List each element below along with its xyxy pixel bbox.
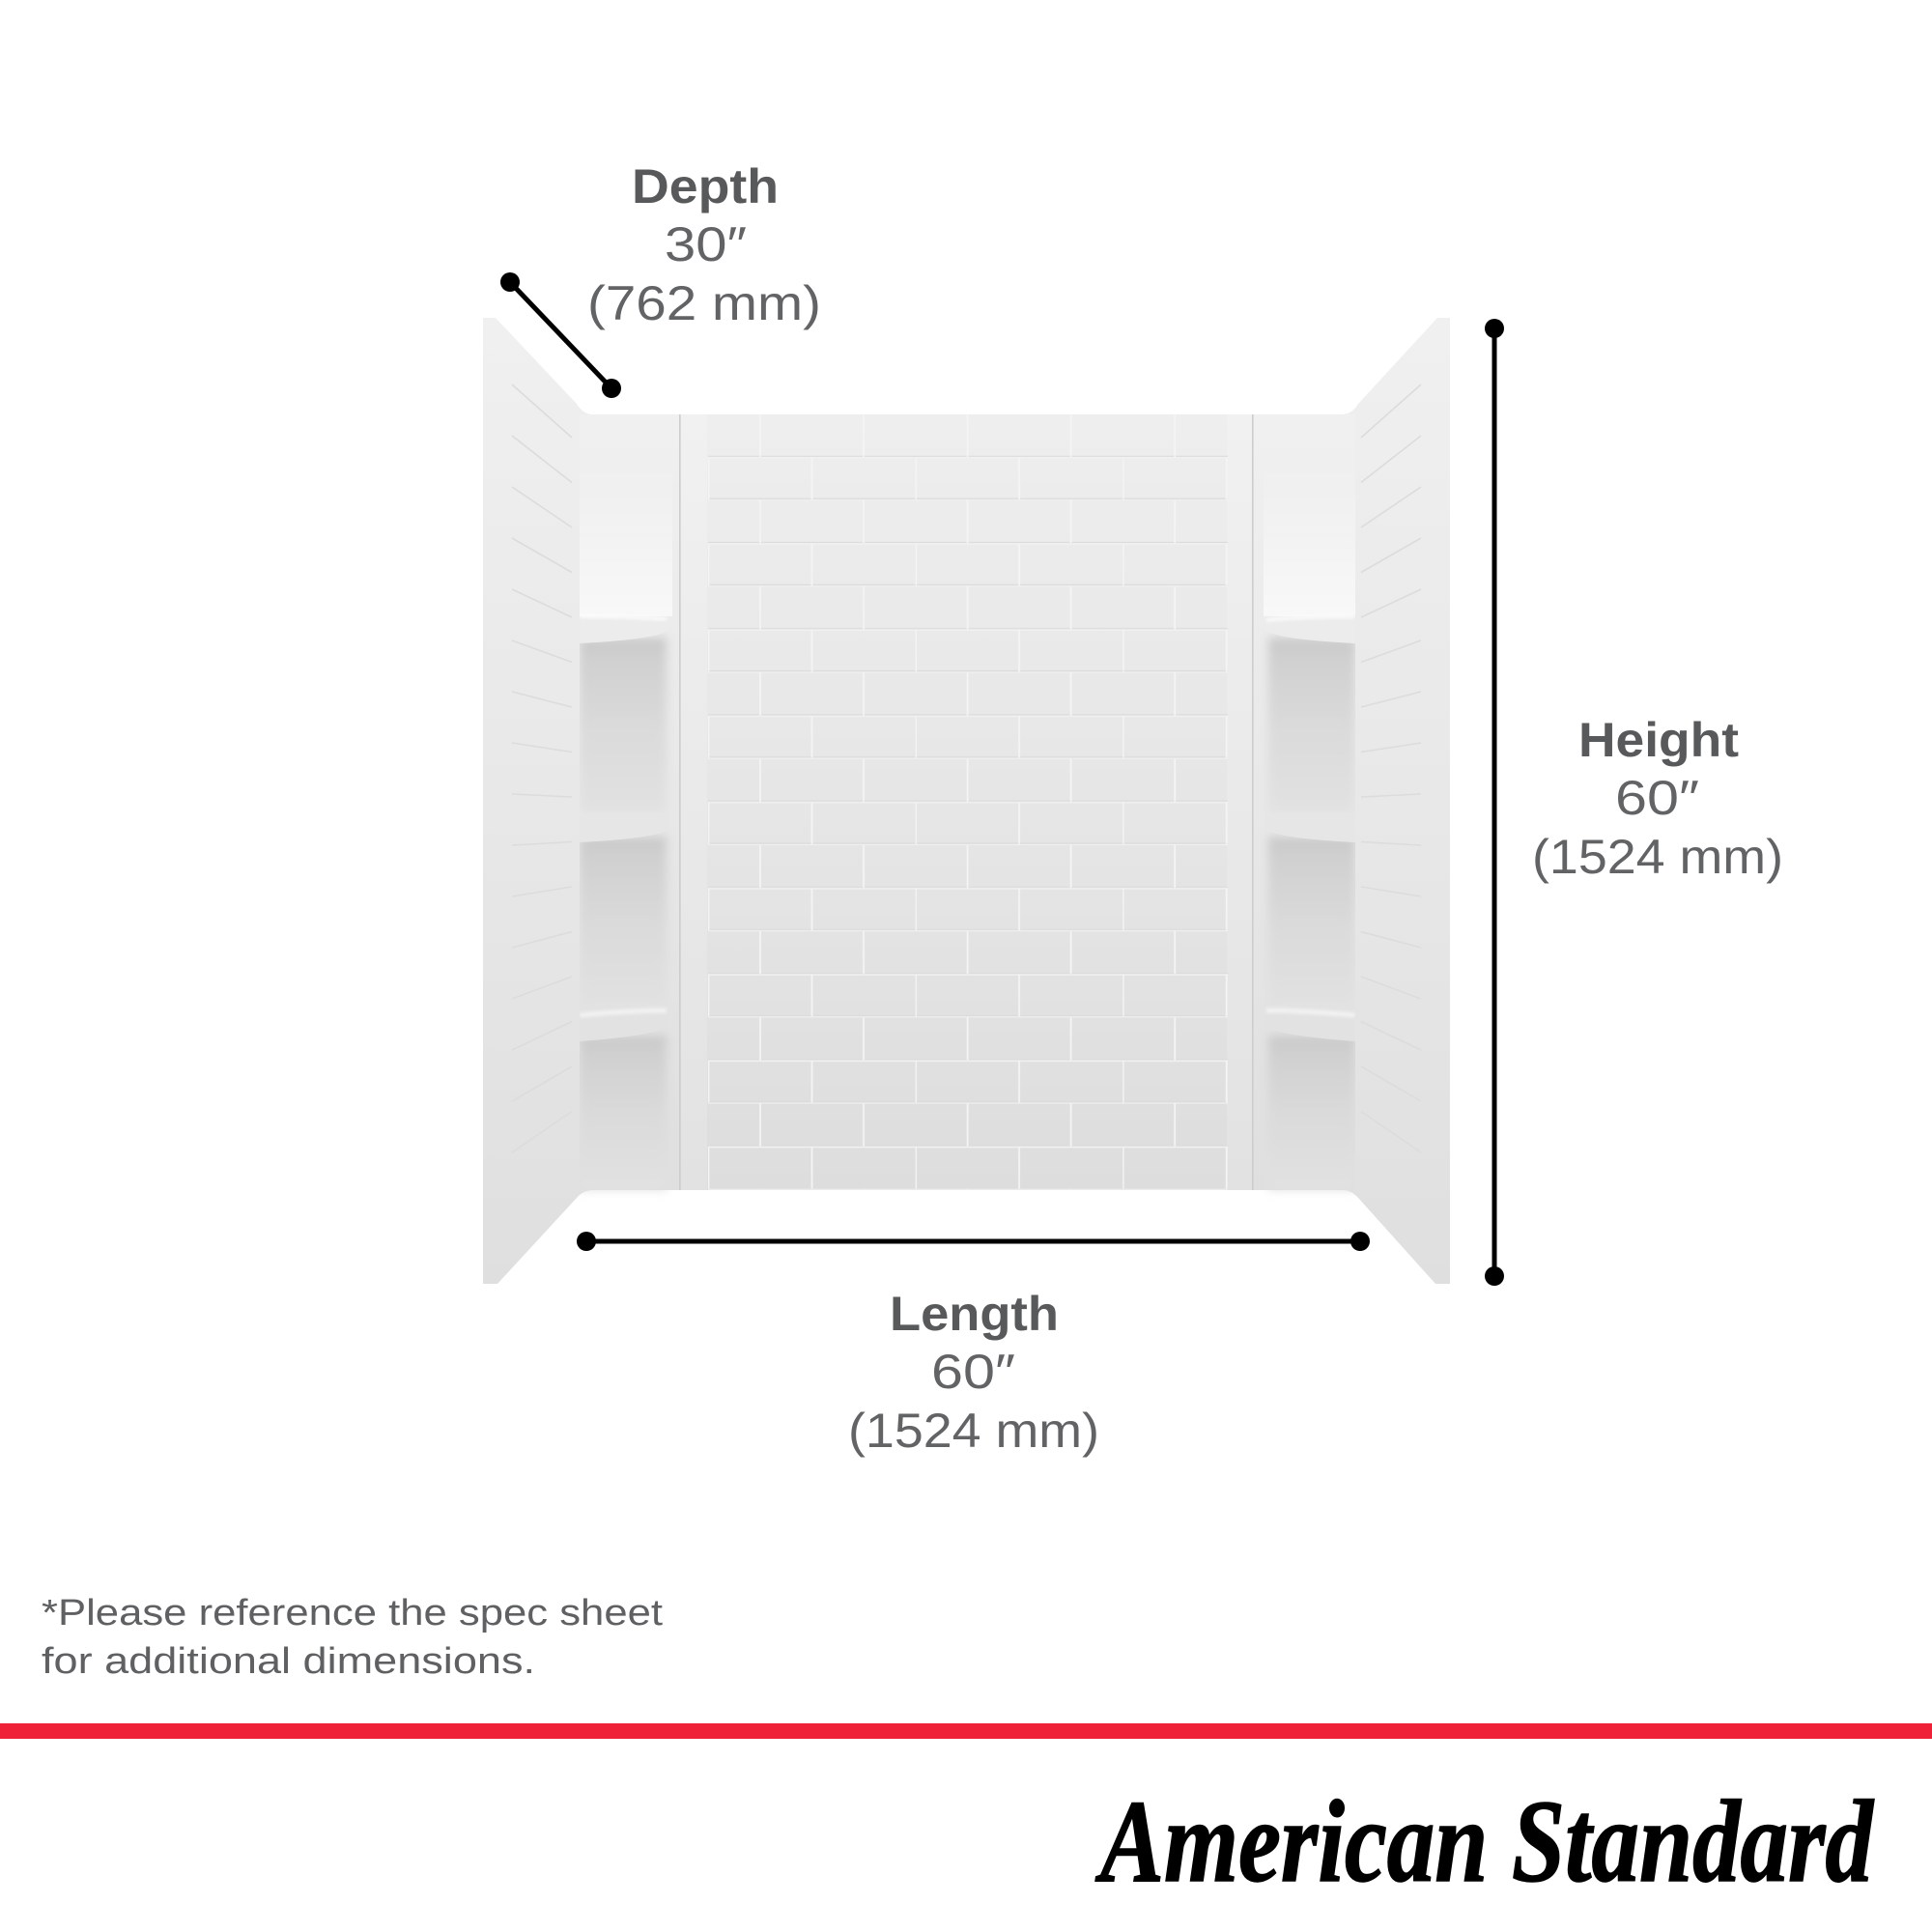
subway tile pattern bbox=[708, 414, 1228, 1190]
footnote: for additional dimensions. bbox=[42, 1641, 535, 1682]
shelf 1 bbox=[1264, 615, 1355, 643]
shelf shadows bbox=[1268, 638, 1355, 1190]
shelf 2 bbox=[1264, 813, 1355, 842]
height label: 60″ bbox=[1615, 771, 1699, 825]
shelf 3 bbox=[1264, 1009, 1355, 1041]
length label: 60″ bbox=[931, 1345, 1015, 1399]
footnote bbox=[42, 1593, 664, 1682]
left side panel bbox=[483, 318, 591, 1284]
shelf 3 bbox=[580, 1009, 669, 1041]
length label: (1524 mm) bbox=[848, 1404, 1099, 1458]
length dimension arrow bbox=[577, 1232, 1370, 1251]
footnote: *Please reference the spec sheet bbox=[42, 1593, 664, 1634]
height dimension arrow bbox=[1485, 319, 1504, 1286]
left alcove with corner shelves bbox=[580, 414, 681, 1190]
shelf 1 bbox=[580, 616, 669, 643]
left seam strip bbox=[681, 414, 707, 1190]
shelf shadows bbox=[580, 638, 667, 1190]
depth label: 30″ bbox=[665, 217, 747, 271]
height label: Height bbox=[1578, 713, 1739, 767]
right seam strip bbox=[1227, 414, 1252, 1190]
right side panel bbox=[1344, 318, 1450, 1284]
shelf 2 bbox=[580, 813, 669, 842]
depth label bbox=[587, 159, 821, 330]
depth dimension arrow bbox=[500, 272, 621, 398]
back wall panel bbox=[580, 414, 1355, 1190]
length label: Length bbox=[890, 1287, 1059, 1341]
shower wall product image bbox=[483, 318, 1450, 1284]
height label bbox=[1532, 713, 1783, 884]
length label bbox=[848, 1287, 1099, 1458]
height label: (1524 mm) bbox=[1532, 830, 1783, 884]
right alcove with corner shelves bbox=[1252, 414, 1355, 1190]
depth label: (762 mm) bbox=[587, 276, 821, 330]
depth label: Depth bbox=[632, 159, 779, 213]
red divider bar bbox=[0, 1723, 1932, 1739]
